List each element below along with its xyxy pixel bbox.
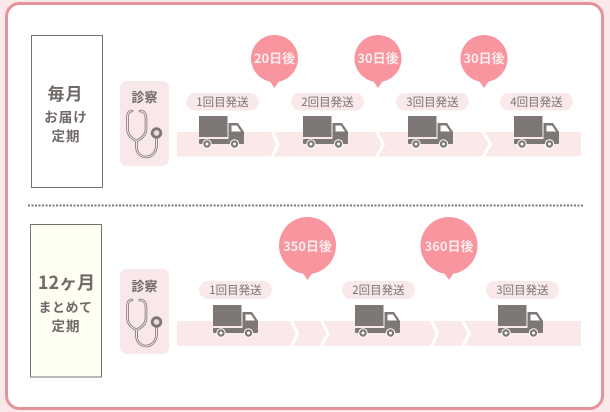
label box: 12 months: まとめて <box>38 297 93 316</box>
exam card: row 2 <box>120 269 169 354</box>
label box: 12 months: 12ヶ月 <box>38 269 95 295</box>
shipment 1 row 2: 1回目発送 <box>209 282 262 298</box>
bubble: 30 days later (second): 30日後 <box>463 48 505 67</box>
shipment 4 row 1: 4回目発送 <box>510 94 563 110</box>
label box: monthly: 定期 <box>52 125 80 145</box>
exam card: row 1 <box>120 81 169 166</box>
bubble: 20 days later <box>251 35 298 88</box>
bubble: 350 days later <box>279 217 336 280</box>
shipment 1 row 2 <box>199 281 272 337</box>
shipment 3 row 2 <box>486 281 559 337</box>
icon: stethoscope <box>128 111 161 157</box>
label box: 12 months: 定期 <box>52 315 80 335</box>
shipment 1 row 1: 1回目発送 <box>196 94 249 110</box>
shipment 4 row 1 <box>500 93 573 148</box>
label box: monthly: お届け <box>44 106 88 126</box>
bubble: 20 days later: 20日後 <box>254 48 295 67</box>
timeline arrow band: row 2 <box>177 320 581 347</box>
bubble: 30 days later (second) <box>460 35 508 88</box>
bubble: 30 days later (first): 30日後 <box>357 48 399 67</box>
shipment 3 row 1 <box>396 93 469 148</box>
timeline arrow band: row 1 <box>177 131 581 158</box>
bubble: 360 days later <box>420 217 478 280</box>
bubble: 30 days later (first) <box>354 35 402 88</box>
label box: monthly <box>32 36 102 188</box>
exam card: row 2: 診察 <box>131 276 158 295</box>
label box: monthly: 毎月 <box>48 80 84 105</box>
shipment 3 row 1: 3回目発送 <box>406 94 459 110</box>
shipment 1 row 1 <box>186 93 259 148</box>
exam card: row 1: 診察 <box>131 87 158 106</box>
shipment 2 row 1: 2回目発送 <box>301 94 354 110</box>
icon: stethoscope <box>128 300 161 346</box>
shipment 2 row 1 <box>291 93 364 148</box>
shipment 2 row 2: 2回目発送 <box>352 282 405 298</box>
shipment 2 row 2 <box>342 281 415 337</box>
bubble: 360 days later: 360日後 <box>424 236 474 255</box>
bubble: 350 days later: 350日後 <box>283 236 332 255</box>
label box: 12 months <box>30 224 102 377</box>
shipment 3 row 2: 3回目発送 <box>496 282 549 298</box>
